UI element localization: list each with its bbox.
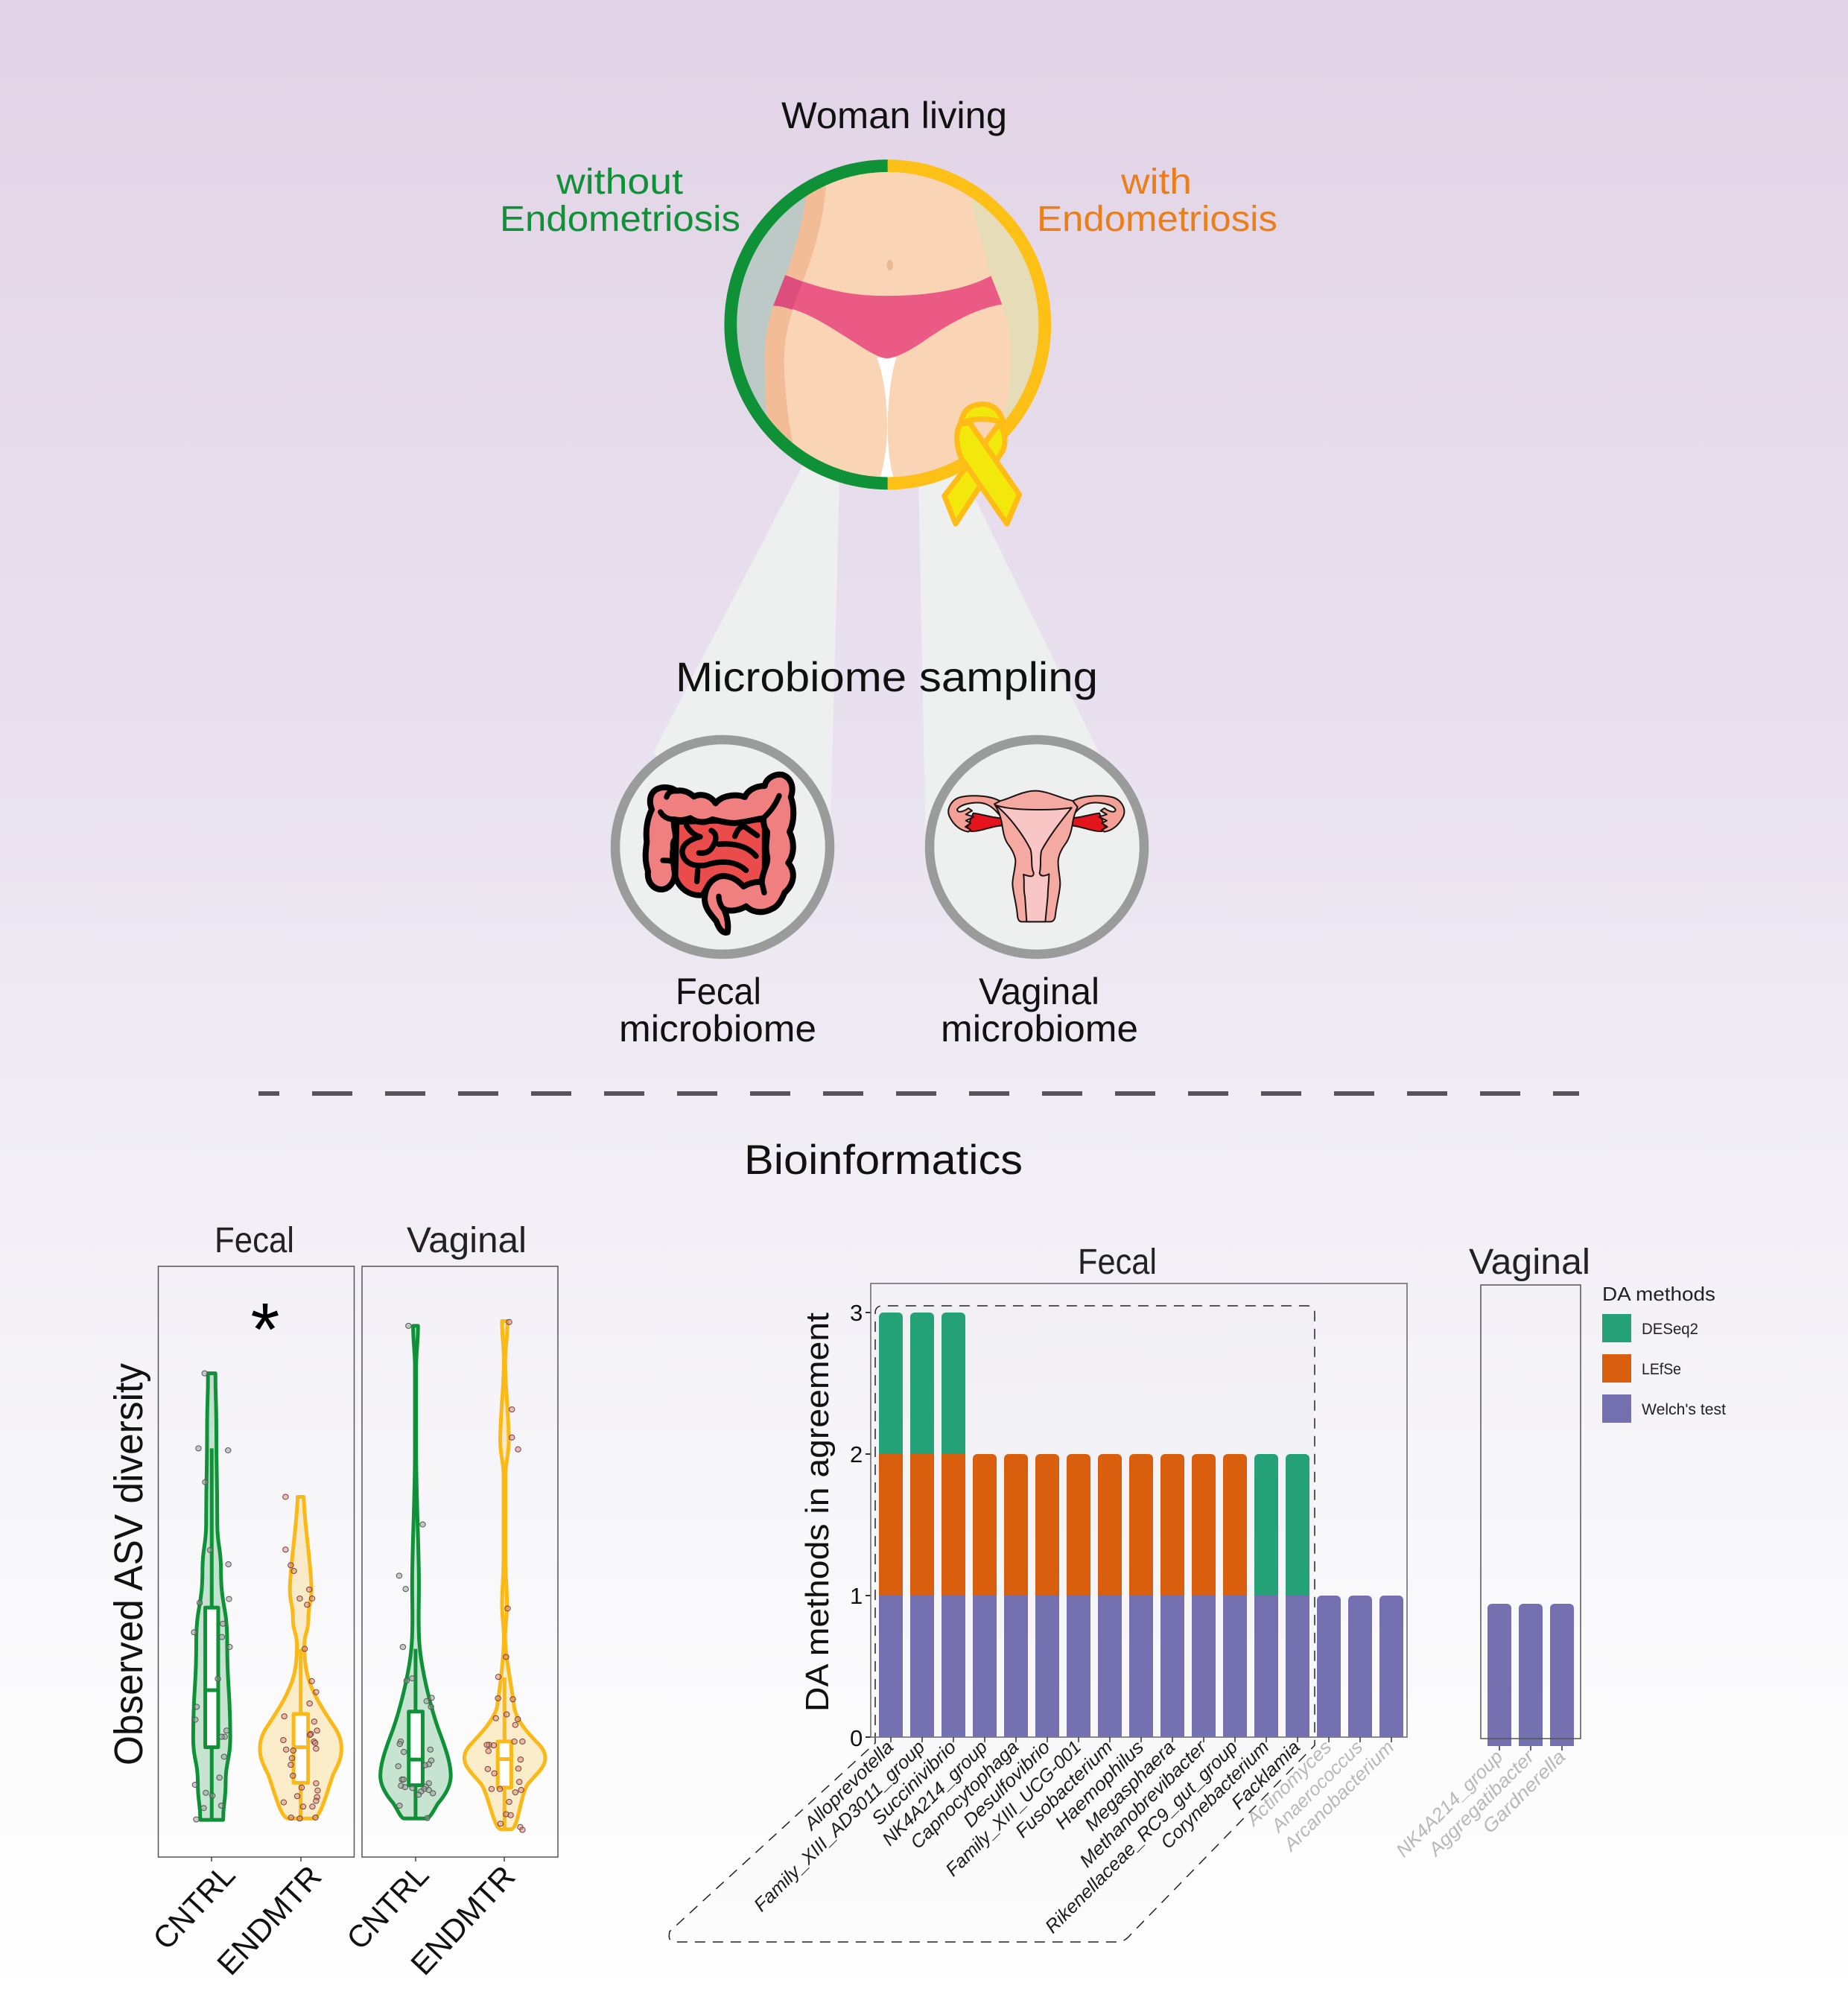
y axis ticks <box>850 1300 871 1751</box>
y axis title: DA methods in agreement <box>799 1313 836 1712</box>
panel title: vaginal: Vaginal <box>1469 1242 1590 1282</box>
y axis title: Observed ASV diversity <box>107 1363 151 1765</box>
y axis ticks: 3 <box>850 1300 863 1326</box>
y axis ticks: 1 <box>850 1583 863 1609</box>
x axis labels: ENDMTR <box>404 1859 522 1981</box>
icon: vaginal circle <box>930 740 1144 954</box>
vaginal panel frame <box>1481 1285 1581 1739</box>
significant genus labels: Alloprevotella <box>799 1736 898 1835</box>
violin: fecal control <box>193 1374 230 1820</box>
faded genus labels: NK4A214_group <box>1392 1746 1507 1862</box>
significance asterisk: * <box>251 1288 279 1371</box>
legend: DA methods: Welch's test <box>1642 1401 1726 1418</box>
faded genus labels: Actinomyces <box>1242 1736 1336 1831</box>
segments: Welch's test <box>879 1596 1403 1745</box>
label: fecal microbiome: microbiome <box>619 1008 816 1050</box>
significant genus labels: Facklamia <box>1228 1736 1304 1814</box>
panel title: vaginal: Vaginal <box>407 1221 527 1260</box>
label: fecal microbiome <box>619 971 816 1050</box>
faded genus labels: Anaerococcus <box>1266 1736 1367 1838</box>
heading: microbiome sampling: Microbiome sampling <box>676 653 1098 700</box>
panel frame: fecal <box>158 1266 355 1857</box>
icon: intestine <box>646 775 793 933</box>
legend: DA methods: DESeq2 <box>1642 1321 1698 1338</box>
x axis labels: CNTRL <box>340 1857 436 1956</box>
significant genus labels: Methanobrevibacter <box>1076 1736 1211 1871</box>
significant genus labels: Family_XIII_UCG-001 <box>942 1736 1085 1880</box>
chart: DA methods stacked bars <box>669 1242 1726 1942</box>
fecal panel frame <box>871 1283 1407 1737</box>
jitter points: endometriosis <box>281 1319 525 1832</box>
x axis labels <box>146 1857 522 1981</box>
x axis labels: ENDMTR <box>210 1859 328 1981</box>
label: with endometriosis <box>1037 162 1277 239</box>
violin: vaginal control <box>381 1326 451 1818</box>
significant genus labels: Rikenellaceae_RC9_gut_group <box>1041 1736 1242 1937</box>
icon: woman torso in circle <box>731 161 1045 524</box>
x axis labels: CNTRL <box>146 1857 242 1956</box>
significant genus labels: Corynebacterium <box>1157 1736 1273 1853</box>
label: vaginal microbiome <box>941 971 1138 1050</box>
label: without endometriosis: Endometriosis <box>500 200 740 239</box>
violin: vaginal endometriosis <box>464 1321 545 1829</box>
panel frame: vaginal <box>362 1266 558 1857</box>
heading: woman living: Woman living <box>781 95 1007 136</box>
faded genus labels: Gardnerella <box>1479 1746 1569 1838</box>
significant genus labels: Family_XIII_AD3011_group <box>750 1736 929 1916</box>
funnel: vaginal sampling <box>918 469 1102 847</box>
legend: DA methods <box>1602 1283 1726 1423</box>
label: vaginal microbiome: microbiome <box>941 1008 1138 1050</box>
significant genus labels: Haemophilus <box>1051 1736 1148 1834</box>
panel title: fecal: Fecal <box>215 1221 294 1260</box>
icon: uterus <box>948 791 1124 921</box>
bars: vaginal <box>1487 1604 1574 1753</box>
significant genus labels <box>750 1736 1304 1937</box>
y axis ticks: 2 <box>850 1441 863 1467</box>
significant genus labels: Desulfovibrio <box>959 1736 1054 1832</box>
chart: observed ASV diversity violins <box>107 1221 558 1981</box>
heading: bioinformatics: Bioinformatics <box>744 1136 1023 1183</box>
panel title: fecal: Fecal <box>1078 1242 1157 1282</box>
icon: fecal circle <box>615 740 830 954</box>
bars: fecal <box>879 1313 1403 1745</box>
segments: LEfSe <box>879 1454 1247 1603</box>
significant genus labels: Fusobacterium <box>1012 1736 1117 1842</box>
label: without endometriosis: without <box>556 162 683 202</box>
legend: DA methods: DA methods <box>1602 1283 1715 1305</box>
label: vaginal microbiome: Vaginal <box>979 971 1099 1012</box>
significant genus labels: Capnocytophaga <box>906 1736 1023 1853</box>
faded genus labels: Arcanobacterium <box>1279 1736 1398 1856</box>
legend: DA methods: LEfSe <box>1642 1361 1681 1378</box>
label: without endometriosis <box>500 162 740 239</box>
faded genus labels <box>1242 1736 1569 1862</box>
selection outline <box>669 1306 1315 1942</box>
label: fecal microbiome: Fecal <box>676 971 761 1012</box>
segments: DESeq2 <box>879 1313 1309 1603</box>
violin: fecal endometriosis <box>260 1497 341 1818</box>
faded genus labels: Aggregatibacter <box>1423 1745 1539 1862</box>
violin plots <box>191 1319 545 1832</box>
jitter points: control <box>191 1323 436 1822</box>
label: with endometriosis: with <box>1120 162 1192 202</box>
funnel: fecal sampling <box>653 462 839 847</box>
significant genus labels: Succinivibrio <box>868 1736 960 1829</box>
significant genus labels: NK4A214_group <box>878 1736 991 1850</box>
label: with endometriosis: Endometriosis <box>1037 200 1277 239</box>
significant genus labels: Megasphaera <box>1081 1736 1179 1835</box>
icon: yellow ribbon <box>944 404 1020 524</box>
y axis ticks: 0 <box>850 1725 863 1751</box>
